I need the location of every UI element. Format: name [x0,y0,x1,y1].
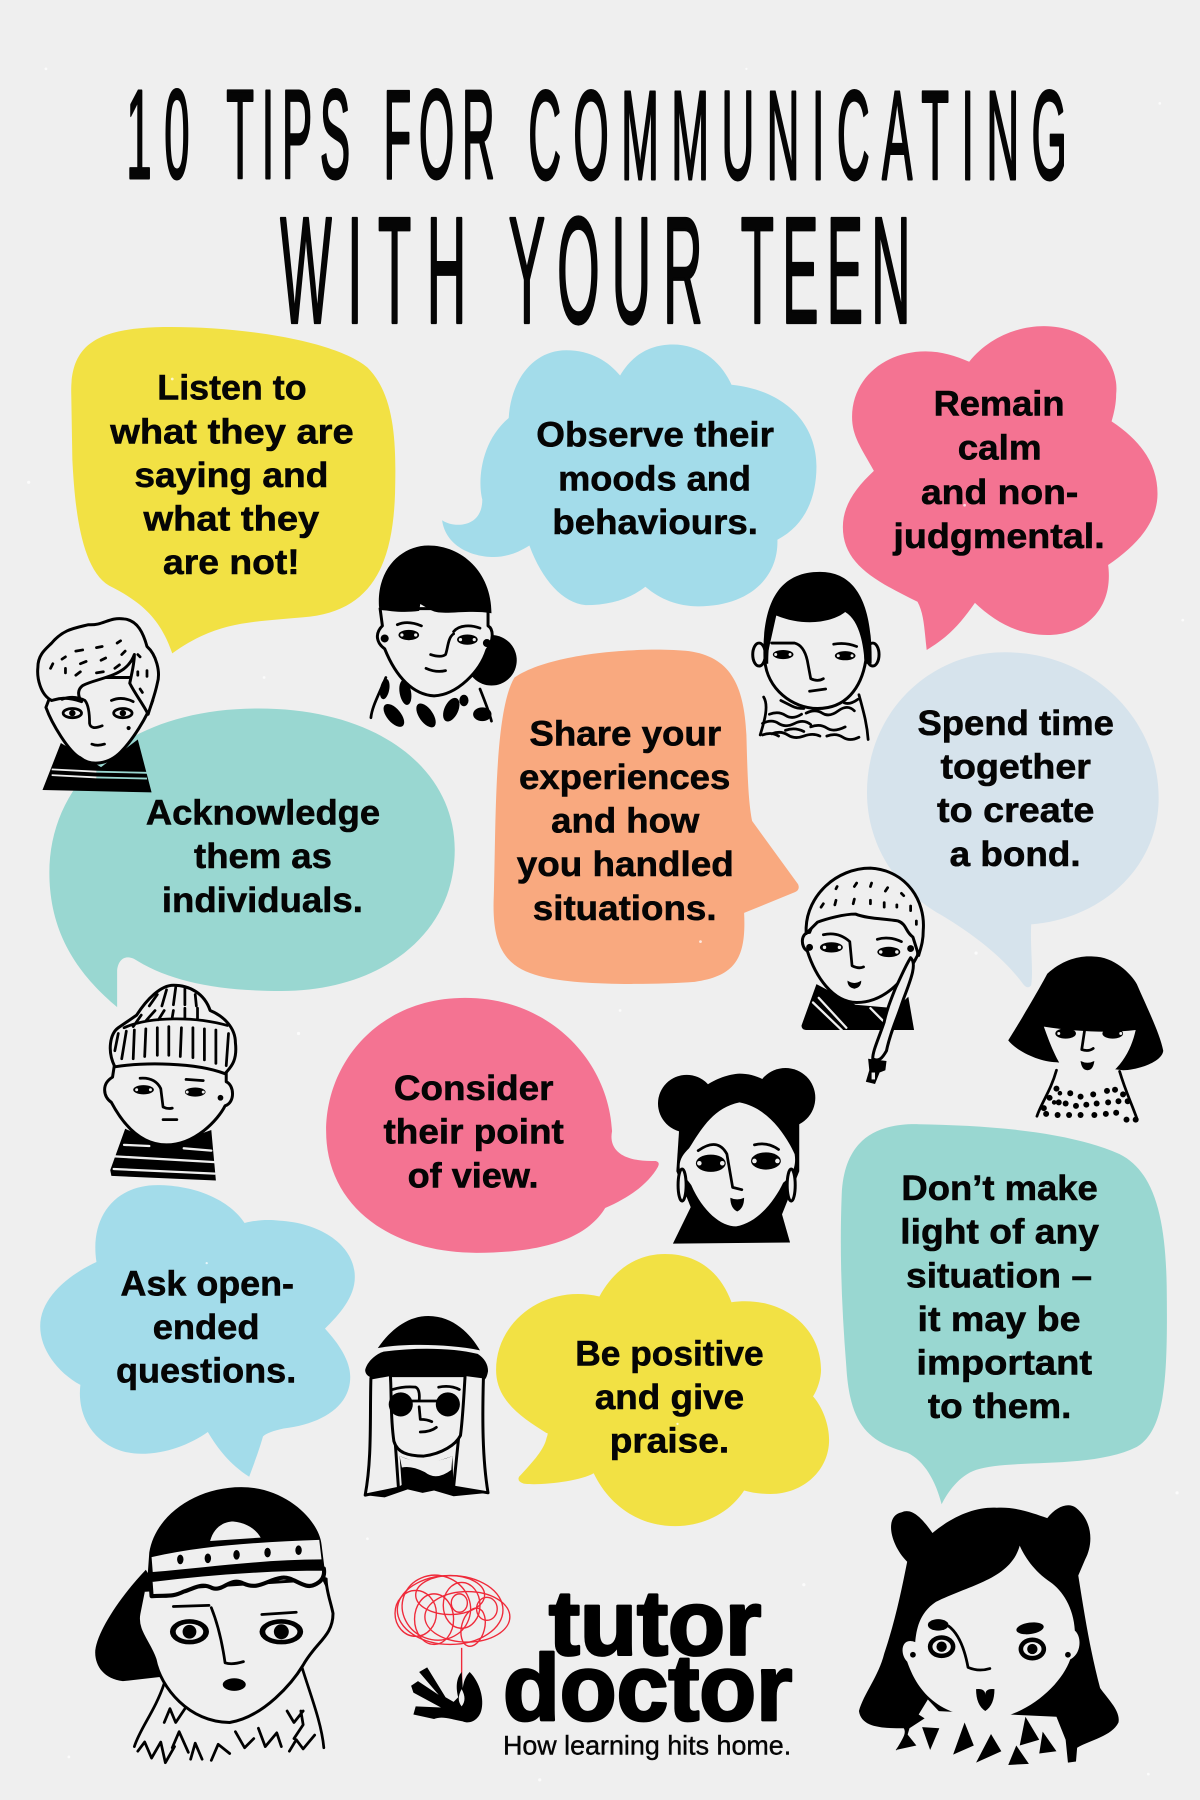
tip text: positive [575,1333,764,1461]
tip text: observe: Observe their [536,415,774,455]
speech bubble: yellow [496,1254,829,1526]
tip text: share: Share your [529,713,721,753]
icon: short-haired teen [753,572,879,740]
tip text: remain calm [892,384,1105,556]
tip text: remain calm: and non- [921,472,1078,512]
title: 10 [126,65,190,206]
tip text: share: experiences [519,757,730,797]
tip text: consider: their point [384,1112,564,1152]
tip text: open-ended: Ask open- [121,1263,294,1303]
tip text: observe [536,415,774,542]
tip text: listen: are not! [163,542,300,582]
tip text: acknowledge [146,792,380,920]
panel: tip acknowledge [49,709,455,1007]
tip text: share: situations. [533,888,717,928]
tip text: spend time: a bond. [950,834,1081,874]
panel: tip open-ended [40,1185,355,1477]
tip text: don't make light: it may be [918,1299,1081,1339]
tip text: don't make light: to them. [928,1386,1071,1426]
tip text: listen: what they [142,499,319,539]
tagline: How learning hits home. [503,1731,791,1761]
tip text: share [517,713,734,928]
tip text: listen: what they are [109,411,354,451]
logo: tutor doctor [393,1566,792,1761]
tip text: consider [384,1068,564,1195]
panel: tip positive [496,1254,829,1526]
panel: tip share [494,650,799,984]
tip text: open-ended [116,1263,296,1391]
tip text: share: and how [551,801,700,841]
title: FOR [384,65,495,206]
speech bubble: pink [843,326,1158,650]
icon: teen with long hair and buns [859,1505,1119,1765]
panel: tip consider [326,998,659,1253]
panel: tip don't make light [841,1124,1167,1504]
tip text: observe: moods and [558,458,751,498]
tip text: open-ended: ended [153,1307,260,1347]
tip text: positive: and give [595,1377,744,1417]
tip text: share: you handled [517,844,734,884]
tip text: open-ended: questions. [116,1351,296,1391]
tip text: acknowledge: them as [194,836,332,876]
tip text: acknowledge: individuals. [162,880,363,920]
icon: red scribble brain on hand [393,1566,510,1722]
tip text: don't make light: light of any [900,1212,1099,1252]
title: TEEN [741,187,911,356]
tip text: acknowledge: Acknowledge [146,792,380,832]
tip text: positive: Be positive [575,1333,764,1373]
icon: teen in beanie [105,985,236,1180]
tip text: spend time: together [940,747,1091,787]
panel: tip spend time [867,652,1159,987]
tip text: don't make light: Don’t make [901,1168,1098,1208]
title: WITH [280,187,466,356]
tip text: remain calm: judgmental. [892,516,1105,556]
icon: teen with bangs and bun [371,545,517,731]
title: YOUR [509,187,703,356]
panel: tip listen [71,327,395,653]
tip text: positive: praise. [610,1421,729,1461]
speech bubble: teal [841,1124,1167,1504]
tip text: listen: Listen to [157,368,307,408]
icon: teen in backwards cap [95,1487,333,1763]
speech bubble: blue [40,1185,355,1477]
icon: teen with hair buns and earrings [658,1068,815,1244]
tip text: don't make light [900,1168,1099,1426]
speech bubble: pale blue [867,652,1159,987]
tip text: don't make light: situation – [906,1255,1092,1295]
tip text: observe: behaviours. [552,502,758,542]
tip text: spend time: to create [937,790,1094,830]
speech bubble: blue [442,344,816,606]
tip text: listen [109,368,354,582]
tip text: spend time: Spend time [918,703,1114,743]
icon: teen in hat and sunglasses [365,1316,488,1497]
speech bubble: yellow [71,327,395,653]
speech bubble: pink [326,998,659,1253]
speech bubble: teal [49,709,455,1007]
panel: tip observe [442,344,816,606]
wordmark: tutor: tutor [549,1573,761,1675]
title: COMMUNICATING [528,66,1067,207]
title: TIPS [226,65,350,206]
panel: tip remain calm [843,326,1158,650]
icon: curly-haired teen [38,619,158,792]
title [126,65,1067,356]
tip text: consider: Consider [394,1068,554,1108]
tip text: remain calm: Remain [934,384,1064,424]
icon: teen with braid [802,868,923,1084]
speech bubble: orange [494,650,799,984]
tip text: spend time [918,703,1114,874]
tip text: don't make light: important [916,1343,1092,1383]
icon: teen with bob [1008,956,1163,1123]
tip text: consider: of view. [408,1155,539,1195]
wordmark: doctor: doctor [503,1635,792,1740]
tip text: listen: saying and [134,455,328,495]
tip text: remain calm: calm [958,427,1042,467]
